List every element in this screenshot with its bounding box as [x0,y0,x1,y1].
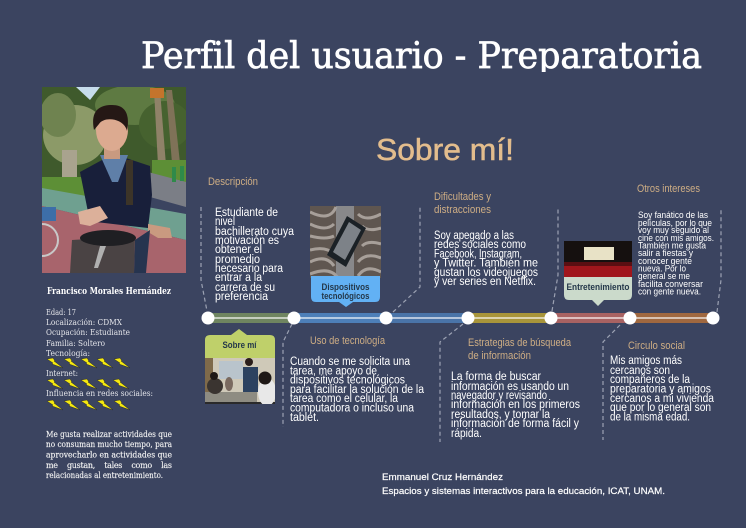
credits: Espacios y sistemas interactivos para la educación, ICAT, UNAM. [382,486,665,497]
panel: Descripción: motivación es [215,235,279,247]
panel: Estrategias de búsqueda de información: Estrategias de búsqueda [468,337,572,349]
timeline [202,312,720,324]
panel: Estrategias de búsqueda de información: navegador y revisando [451,390,547,402]
dashed connectors [201,207,721,442]
panel: Descripción: necesario para [215,263,284,275]
panel: Descripción: carrera de su [215,282,275,294]
panel: Descripción: bachillerato cuya [215,226,295,238]
panel: Estrategias de búsqueda de información: La forma de buscar [451,371,541,383]
rating: internet bolts [47,379,129,389]
card: Entretenimiento [564,241,632,306]
panel: Uso de tecnología: dispositivos tecnológicos [290,374,405,386]
panel: Estrategias de búsqueda de información [451,337,580,440]
panel: Círculo social: cercanos a mi vivienda [610,393,715,405]
credits: Emmanuel Cruz Hernández [382,472,503,483]
panel: Estrategias de búsqueda de información: información en los primeros [451,399,580,411]
panel: Dificultades y distracciones: Dificultades y [434,191,491,203]
panel: Descripción: Estudiante de [215,207,278,219]
panel: Uso de tecnología [290,335,425,424]
card: Dispositivos tecnológicos [310,206,381,307]
profile paragraph: me gustan, tales como las [46,461,172,470]
profile details and ratings: Ocupación: Estudiante [46,327,130,338]
card: Sobre mí: Sobre mí [222,340,257,350]
profile paragraph: aprovecharlo en actividades que [46,450,172,460]
panel: Dificultades y distracciones: distracciones [434,204,491,216]
panel: Descripción [208,176,295,303]
profile details and ratings: Tecnología: [46,348,90,359]
profile paragraph: Me gusta realizar actividades que [46,430,172,439]
panel: Dificultades y distracciones: Facebook, Instagram, [434,248,522,260]
credits [382,472,665,497]
panel: Círculo social: cercanos son [610,365,670,377]
profile details and ratings: Localización: CDMX [46,317,123,328]
panel: Uso de tecnología: Uso de tecnología [310,335,386,347]
panel: Dificultades y distracciones: Soy apegado a las [434,230,514,242]
profile details and ratings: Influencia en redes sociales: [46,389,153,399]
panel: Círculo social [610,340,715,424]
panel: Otros intereses: facilita conversar [638,279,703,290]
panel: Dificultades y distracciones: gustan los videojuegos [434,267,538,279]
rating: tecnología bolts [47,358,130,368]
panel: Otros intereses [637,183,714,298]
panel: Uso de tecnología: Cuando se me solicita una [290,356,411,368]
rating: redes sociales bolts [47,400,130,410]
panel: Uso de tecnología: tablet. [290,412,319,424]
panel: Estrategias de búsqueda de información: información es usando un [451,381,569,393]
panel: Otros intereses: Otros intereses [637,183,700,195]
panel: Círculo social: que por lo general son [610,402,711,414]
panel: Uso de tecnología: computadora o incluso una [290,402,415,414]
panel: Estrategias de búsqueda de información: resultados, y tomar la [451,409,551,421]
card: Dispositivos tecnológicos: tecnológicos [322,291,370,301]
panel: Dificultades y distracciones: y Twitter. También me [434,258,538,270]
panel: Otros intereses: con gente nueva. [638,286,701,298]
profile paragraph: no consuman mucho tiempo, para [46,440,172,449]
profile name: Francisco Morales Hernández [47,286,171,297]
profile details and ratings: Familia: Soltero [46,339,105,349]
panel: Círculo social: compañeros de la [610,374,691,386]
panel: Otros intereses: películas, por lo que [638,218,712,229]
panel: Uso de tecnología: tarea, me apoyo de [290,366,377,378]
panel: Descripción: obtener el [215,244,262,256]
panel: Otros intereses: cine con mis amigos. [638,233,714,244]
panel: Descripción: preferencia [215,291,269,303]
panel: Descripción: nivel [215,216,235,228]
panel: Estrategias de búsqueda de información: información de forma fácil y [451,418,579,430]
card: Entretenimiento: Entretenimiento [566,282,630,292]
panel: Otros intereses: Soy fanático de las [638,210,708,221]
panel: Uso de tecnología: para facilitar la solución de la [290,384,425,396]
panel: Dificultades y distracciones: redes sociales como [434,239,526,251]
section heading: Sobre mí: Sobre mí! [376,132,514,167]
profile details and ratings: Edad: 17 [46,308,76,318]
title: Perfil del usuario - Preparatoria [141,36,702,77]
panel: Descripción: promedio [215,254,260,266]
panel: Otros intereses: general se me [638,271,690,282]
profile paragraph: relacionadas al entretenimiento. [46,471,163,480]
panel: Descripción: entrar a la [215,272,263,284]
panel: Dificultades y distracciones [434,191,538,288]
panel: Círculo social: de la misma edad. [610,412,690,424]
panel: Otros intereses: nueva. Por lo [638,264,686,274]
profile details and ratings: Internet: [46,369,78,379]
card: Sobre mí [205,329,276,406]
card: Dispositivos tecnológicos: Dispositivos [322,282,370,292]
profile details and ratings [46,308,153,410]
panel: Dificultades y distracciones: y ver series en Netflix. [434,276,536,288]
panel: Estrategias de búsqueda de información: rápida. [451,428,482,440]
panel: Círculo social: Circulo social [628,340,685,352]
panel: Otros intereses: También me gusta [638,240,707,252]
panel: Estrategias de búsqueda de información: de información [468,350,531,362]
profile paragraph [46,430,172,480]
panel: Círculo social: Mis amigos más [610,355,682,367]
panel: Otros intereses: salir a fiestas y [638,248,693,259]
panel: Círculo social: preparatoria y amigos [610,384,711,396]
panel: Descripción: Descripción [208,176,258,188]
panel: Uso de tecnología: tarea como el celular, la [290,393,399,405]
panel: Otros intereses: conocer gente [638,256,692,267]
panel: Otros intereses: voy muy seguido al [638,225,709,236]
photo: portrait of Francisco [42,87,186,273]
